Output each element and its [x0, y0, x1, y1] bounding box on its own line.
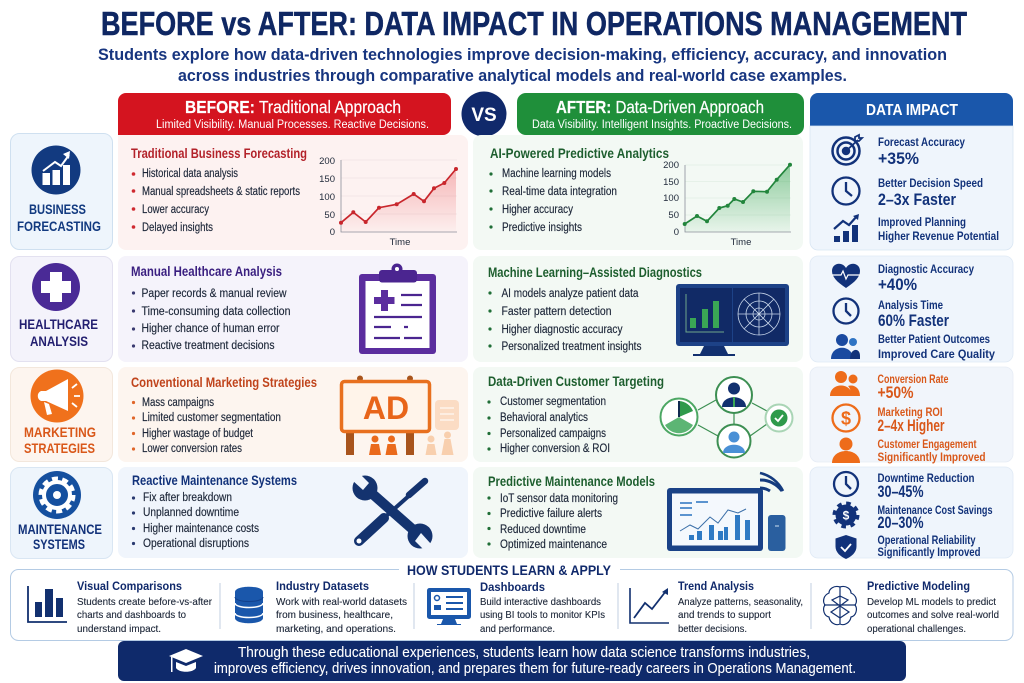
- after header: AFTER: Data-Driven Approach: [556, 97, 764, 117]
- panel: conventional marketing strategies: Conventional Marketing Strategies: [131, 374, 317, 390]
- panel: conventional marketing strategies: Lower conversion rates: [142, 443, 242, 455]
- panel: traditional business forecasting: Traditional Business Forecasting: [131, 145, 307, 161]
- closing banner: Through these educational experiences, students learn how data science transforms industries,: [238, 645, 810, 661]
- panel: ai-powered predictive analytics: [473, 135, 803, 250]
- icon: shield: [836, 535, 856, 559]
- category: maintenance systems: SYSTEMS: [33, 536, 85, 552]
- panel: impact maintenance: [810, 467, 1013, 559]
- panel: manual healthcare analysis: Manual Healthcare Analysis: [131, 263, 282, 279]
- item: predictive modeling: Predictive Modeling: [867, 579, 970, 593]
- panel: impact maintenance: 30–45%: [878, 483, 924, 501]
- line chart: before: 150: [319, 174, 335, 185]
- panel: impact forecasting: Better Decision Speed: [878, 178, 983, 190]
- category: healthcare analysis: [10, 256, 112, 362]
- panel: ai-powered predictive analytics: Higher accuracy: [502, 204, 573, 216]
- panel: machine learning diagnostics: Faster pattern detection: [502, 306, 612, 318]
- category: marketing strategies: STRATEGIES: [24, 440, 95, 456]
- panel: impact healthcare: Analysis Time: [878, 300, 943, 312]
- panel: predictive maintenance models: Optimized maintenance: [500, 539, 607, 551]
- category: maintenance systems: [10, 468, 112, 558]
- item: dashboards: and performance.: [480, 623, 555, 635]
- item: industry datasets: Work with real-world datasets: [276, 596, 407, 608]
- panel: data-driven customer targeting: Customer segmentation: [500, 396, 606, 408]
- panel: impact forecasting: [810, 126, 1013, 250]
- item: predictive modeling: operational challenges.: [867, 623, 966, 635]
- panel: predictive maintenance models: [473, 467, 803, 558]
- row: healthcare analysis: [10, 256, 1013, 362]
- panel: conventional marketing strategies: Mass campaigns: [142, 397, 214, 409]
- panel: manual healthcare analysis: [118, 256, 468, 362]
- icon: dollar: $: [841, 408, 851, 428]
- line chart: before: 100: [319, 192, 335, 203]
- item: trend analysis: better decisions.: [678, 623, 747, 635]
- item: dashboards: [427, 580, 605, 635]
- panel: data-driven customer targeting: [473, 367, 803, 462]
- panel: reactive maintenance systems: Fix after breakdown: [143, 492, 232, 504]
- section heading: HOW STUDENTS LEARN & APPLY: [407, 563, 611, 578]
- panel: predictive maintenance models: Reduced downtime: [500, 524, 586, 536]
- after header: Data Visibility. Intelligent Insights. Proactive Decisions.: [532, 119, 792, 131]
- panel: impact forecasting: Higher Revenue Potential: [878, 231, 999, 243]
- item: industry datasets: from business, healthcare,: [276, 609, 393, 621]
- icon: tablet dashboard and sensor: [667, 473, 786, 551]
- before header: [118, 93, 451, 135]
- icon: customer network: [660, 377, 792, 458]
- category: business forecasting: [10, 134, 112, 250]
- panel: machine learning diagnostics: [473, 256, 803, 362]
- panel: traditional business forecasting: [118, 135, 468, 250]
- category: marketing strategies: MARKETING: [24, 424, 96, 440]
- icon: cost gear: [834, 504, 858, 526]
- icon: clock: [832, 178, 860, 204]
- item: dashboards: Build interactive dashboards: [480, 596, 601, 608]
- category: maintenance systems: MAINTENANCE: [18, 521, 102, 537]
- panel: impact maintenance: Downtime Reduction: [878, 473, 974, 485]
- panel: data-driven customer targeting: Data-Driven Customer Targeting: [488, 373, 664, 389]
- category: business forecasting: BUSINESS: [29, 201, 86, 217]
- panel: traditional business forecasting: Lower accuracy: [142, 204, 209, 216]
- item: visual comparisons: understand impact.: [77, 623, 161, 635]
- line chart: after: 100: [663, 193, 679, 204]
- panel: manual healthcare analysis: Reactive treatment decisions: [142, 340, 275, 352]
- item: trend analysis: [630, 579, 803, 635]
- panel: machine learning diagnostics: Personalized treatment insights: [502, 341, 642, 353]
- icon: heart: [832, 264, 860, 288]
- panel: traditional business forecasting: Delayed insights: [142, 222, 213, 234]
- item: dashboards: Dashboards: [480, 580, 545, 594]
- panel: impact maintenance: Significantly Improved: [878, 547, 980, 559]
- before header: Limited Visibility. Manual Processes. Reactive Decisions.: [156, 119, 429, 131]
- line chart: before: 50: [324, 210, 335, 221]
- icon: clipboard: [359, 264, 436, 354]
- panel: data-driven customer targeting: Higher conversion & ROI: [500, 443, 610, 455]
- panel: data-driven customer targeting: Personalized campaigns: [500, 428, 606, 440]
- panel: reactive maintenance systems: Higher maintenance costs: [143, 523, 259, 535]
- panel: machine learning diagnostics: Machine Learning–Assisted Diagnostics: [488, 264, 702, 280]
- icon: dollar: [832, 404, 860, 432]
- panel: reactive maintenance systems: Reactive Maintenance Systems: [132, 472, 297, 488]
- icon: graduation cap: [169, 649, 203, 672]
- panel: conventional marketing strategies: [118, 367, 468, 462]
- after header: [517, 93, 804, 135]
- line chart: after: 50: [668, 210, 679, 221]
- item: industry datasets: marketing, and operations.: [276, 623, 396, 635]
- line chart: before: 200: [319, 156, 335, 167]
- panel: ai-powered predictive analytics: Machine learning models: [502, 168, 611, 180]
- panel: how students learn and apply: [10, 563, 1013, 640]
- icon: wrench and screwdriver: [352, 474, 432, 550]
- panel: impact marketing: 2–4x Higher: [878, 417, 945, 435]
- panel: impact forecasting: +35%: [878, 150, 919, 168]
- panel: impact marketing: Significantly Improved: [878, 452, 986, 464]
- item: predictive modeling: outcomes and solve real-world: [867, 609, 999, 621]
- panel: impact marketing: Conversion Rate: [878, 374, 948, 386]
- line chart: after: 200: [663, 160, 679, 171]
- line chart: before: [319, 156, 458, 248]
- row: maintenance systems: [10, 467, 1013, 559]
- data impact header: DATA IMPACT: [866, 102, 958, 119]
- category: healthcare analysis: ANALYSIS: [30, 333, 88, 349]
- item: trend analysis: Trend Analysis: [678, 579, 754, 593]
- item: predictive modeling: [824, 579, 999, 635]
- line chart: after: [663, 160, 792, 248]
- panel: impact healthcare: Diagnostic Accuracy: [878, 264, 975, 276]
- vs badge: VS: [471, 105, 497, 126]
- icon: patients: [831, 334, 860, 359]
- panel: impact marketing: Customer Engagement: [878, 439, 977, 451]
- icon: growth chart: [834, 214, 859, 242]
- line chart: after: 0: [674, 227, 679, 238]
- closing banner: improves efficiency, drives innovation, and prepares them for future-ready careers in Operations Management.: [214, 661, 856, 677]
- panel: traditional business forecasting: Historical data analysis: [142, 168, 238, 180]
- category: business forecasting: FORECASTING: [17, 218, 101, 234]
- panel: conventional marketing strategies: Limited customer segmentation: [142, 412, 281, 424]
- icon: ad billboard: AD: [363, 390, 409, 426]
- panel: predictive maintenance models: Predictive failure alerts: [500, 508, 602, 520]
- panel: impact healthcare: 60% Faster: [878, 312, 949, 330]
- row: business forecasting: [10, 126, 1013, 250]
- panel: impact healthcare: Improved Care Quality: [878, 349, 996, 361]
- panel: reactive maintenance systems: [118, 467, 468, 558]
- item: dashboards: using BI tools to monitor KPIs: [480, 609, 605, 621]
- subtitle: Students explore how data-driven technologies improve decision-making, efficiency, accuracy, and innovation: [98, 45, 947, 64]
- item: visual comparisons: Students create before-vs-after: [77, 596, 212, 608]
- panel: impact maintenance: 20–30%: [878, 514, 924, 532]
- subtitle: across industries through comparative analytical models and real-world case examples.: [178, 66, 847, 85]
- item: trend analysis: Analyze patterns, seasonality,: [678, 596, 803, 608]
- panel: impact forecasting: Improved Planning: [878, 217, 966, 229]
- icon: target: [832, 135, 862, 164]
- item: predictive modeling: Develop ML models to predict: [867, 596, 996, 608]
- icon: customers: [830, 371, 860, 396]
- panel: manual healthcare analysis: Higher chance of human error: [142, 323, 280, 335]
- panel: impact forecasting: 2–3x Faster: [878, 191, 956, 209]
- line chart: before: 0: [330, 227, 335, 238]
- vs badge: [462, 92, 506, 136]
- item: visual comparisons: charts and dashboards to: [77, 609, 186, 621]
- icon: ad billboard: [342, 376, 459, 455]
- icon: customer: [832, 438, 860, 463]
- panel: predictive maintenance models: Predictive Maintenance Models: [488, 473, 655, 489]
- closing banner: [118, 641, 906, 681]
- item: visual comparisons: [28, 579, 212, 635]
- panel: ai-powered predictive analytics: Real-time data integration: [502, 186, 617, 198]
- category: healthcare analysis: HEALTHCARE: [19, 316, 98, 332]
- panel: ai-powered predictive analytics: Predictive insights: [502, 222, 582, 234]
- item: industry datasets: Industry Datasets: [276, 579, 369, 593]
- panel: impact maintenance: Maintenance Cost Savings: [878, 505, 992, 517]
- panel: manual healthcare analysis: Time-consuming data collection: [142, 306, 290, 318]
- panel: impact marketing: Marketing ROI: [878, 407, 942, 419]
- panel: ai-powered predictive analytics: AI-Powered Predictive Analytics: [490, 145, 669, 161]
- subtitle: [98, 45, 947, 85]
- item: industry datasets: [235, 579, 407, 635]
- panel: impact maintenance: Operational Reliability: [878, 535, 976, 547]
- item: visual comparisons: Visual Comparisons: [77, 579, 182, 593]
- panel: impact marketing: +50%: [878, 384, 914, 402]
- icon: clock: [834, 298, 858, 324]
- panel: conventional marketing strategies: Higher wastage of budget: [142, 428, 254, 440]
- panel: impact healthcare: +40%: [878, 276, 917, 294]
- panel: impact healthcare: [810, 256, 1013, 362]
- panel: impact forecasting: Forecast Accuracy: [878, 137, 966, 149]
- line chart: before: Time: [390, 237, 410, 248]
- panel: impact healthcare: Better Patient Outcomes: [878, 334, 990, 346]
- line chart: after: 150: [663, 177, 679, 188]
- panel: manual healthcare analysis: Paper records & manual review: [142, 288, 287, 300]
- category: marketing strategies: [10, 368, 112, 462]
- panel: data-driven customer targeting: Behavioral analytics: [500, 412, 588, 424]
- before header: BEFORE: Traditional Approach: [185, 97, 401, 117]
- panel: machine learning diagnostics: Higher diagnostic accuracy: [502, 324, 623, 336]
- icon: diagnostic monitor: [676, 284, 789, 356]
- panel: traditional business forecasting: Manual spreadsheets & static reports: [142, 186, 300, 198]
- icon: cost gear: $: [843, 508, 850, 522]
- panel: predictive maintenance models: IoT sensor data monitoring: [500, 493, 618, 505]
- icon: clock: [834, 472, 858, 496]
- panel: reactive maintenance systems: Operational disruptions: [143, 538, 249, 550]
- panel: machine learning diagnostics: AI models analyze patient data: [502, 288, 639, 300]
- row: marketing strategies: [10, 367, 1013, 464]
- item: trend analysis: and trends to support: [678, 609, 771, 621]
- data impact header: [810, 93, 1013, 126]
- line chart: after: Time: [731, 237, 751, 248]
- panel: impact marketing: [810, 367, 1013, 464]
- panel: reactive maintenance systems: Unplanned downtime: [143, 507, 239, 519]
